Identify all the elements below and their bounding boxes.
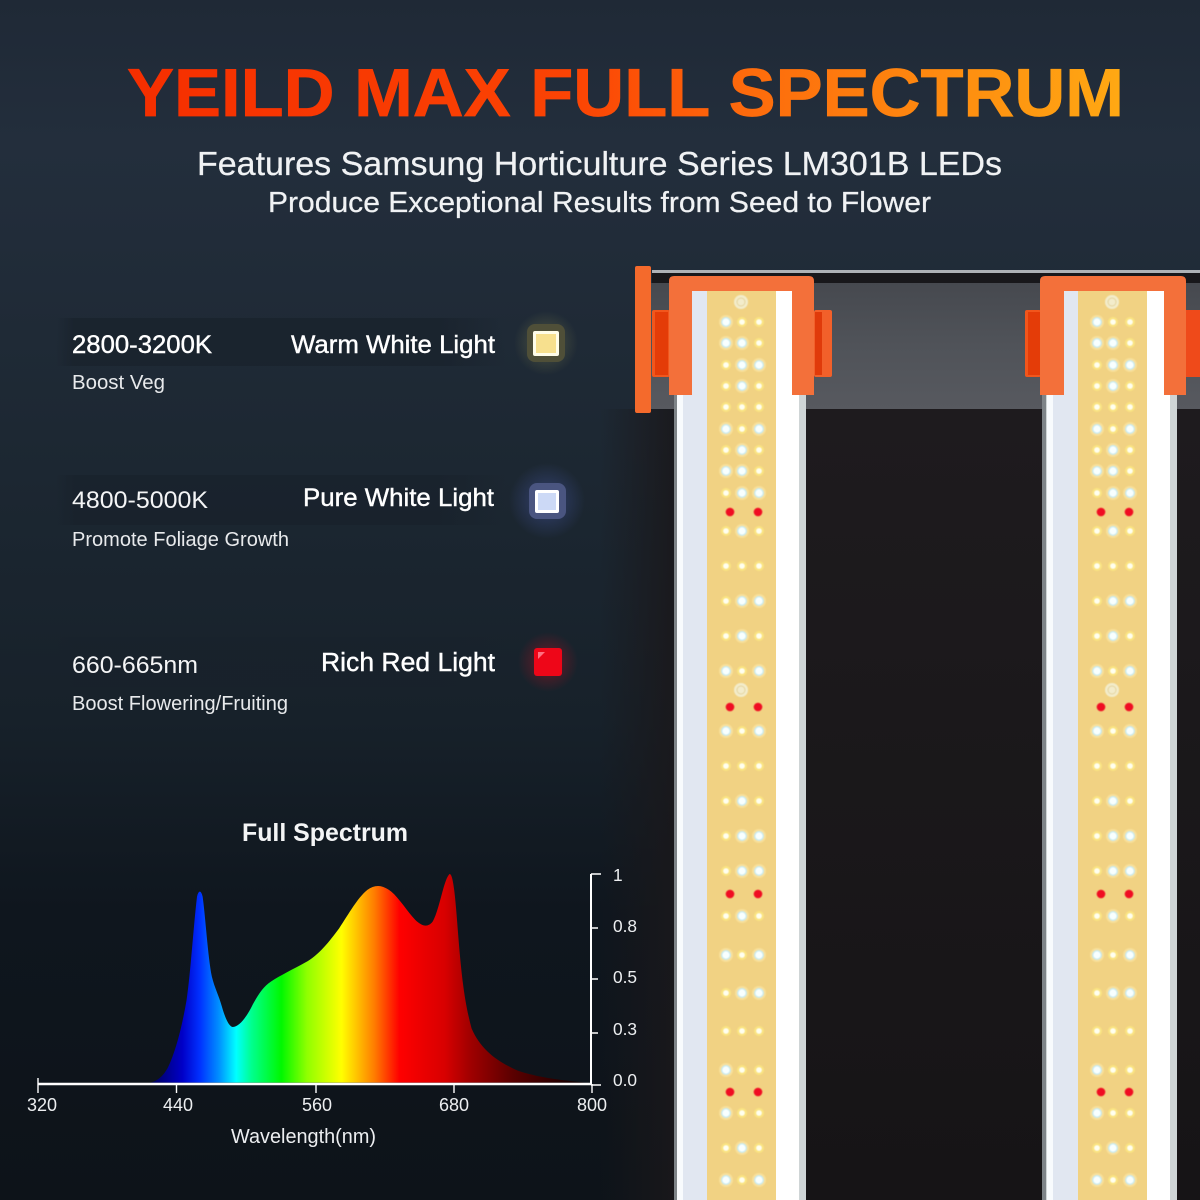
title: YEILD MAX FULL SPECTRUM bbox=[127, 55, 1124, 131]
x axis labels: 680 bbox=[439, 1095, 469, 1115]
clip bbox=[669, 276, 814, 395]
tabs bbox=[1025, 310, 1041, 377]
panel: warm white light bbox=[56, 318, 506, 394]
y axis labels: 0.0 bbox=[613, 1070, 637, 1090]
icon: warm white LED bbox=[514, 311, 578, 375]
panel: warm white light: Boost Veg bbox=[72, 372, 165, 394]
panel: rich red light: Rich Red Light bbox=[321, 649, 495, 677]
subtitle: Produce Exceptional Results from Seed to Flower bbox=[268, 187, 931, 219]
chart heading: Full Spectrum bbox=[242, 819, 408, 847]
icon: red LED bbox=[518, 632, 578, 692]
crossbar bbox=[650, 283, 1200, 409]
left post bbox=[635, 266, 651, 413]
y axis labels bbox=[613, 865, 637, 1090]
panel: warm white light: Warm White Light bbox=[291, 331, 495, 359]
x axis labels: 800 bbox=[577, 1095, 607, 1115]
panel: grow light fixture bbox=[635, 266, 1200, 1200]
chart: spectrum bbox=[27, 865, 637, 1148]
icon: pure white LED bbox=[509, 463, 585, 539]
panel: rich red light: 660-665nm bbox=[72, 652, 198, 679]
y axis labels: 1 bbox=[613, 865, 623, 885]
panel: pure white light bbox=[56, 475, 506, 551]
back wall bbox=[600, 409, 1200, 1200]
light bar 2 bbox=[1025, 276, 1200, 1200]
y axis labels: 0.8 bbox=[613, 916, 637, 936]
subtitle bbox=[197, 145, 1002, 219]
x axis title: Wavelength(nm) bbox=[231, 1126, 376, 1148]
x axis labels bbox=[27, 1095, 607, 1115]
panel: warm white light: 2800-3200K bbox=[72, 331, 212, 359]
clip bbox=[1040, 276, 1186, 395]
subtitle: Features Samsung Horticulture Series LM301B LEDs bbox=[197, 145, 1002, 182]
panel: rich red light bbox=[56, 637, 506, 715]
x axis labels: 560 bbox=[302, 1095, 332, 1115]
LED array: bar 1 bbox=[719, 295, 766, 1187]
spectrum curve bbox=[150, 874, 586, 1083]
tabs bbox=[652, 310, 670, 377]
light bar 1 bbox=[652, 276, 832, 1200]
panel: pure white light: Promote Foliage Growth bbox=[72, 529, 289, 551]
LED array: bar 2 bbox=[1090, 295, 1137, 1187]
panel: pure white light: Pure White Light bbox=[303, 484, 494, 512]
y axis labels: 0.5 bbox=[613, 967, 637, 987]
rail bbox=[652, 270, 1200, 273]
panel: pure white light: 4800-5000K bbox=[72, 487, 209, 514]
x axis labels: 320 bbox=[27, 1095, 57, 1115]
x axis bbox=[38, 1078, 592, 1093]
y axis labels: 0.3 bbox=[613, 1019, 637, 1039]
x axis labels: 440 bbox=[163, 1095, 193, 1115]
y axis bbox=[591, 874, 601, 1085]
panel: rich red light: Boost Flowering/Fruiting bbox=[72, 693, 288, 715]
